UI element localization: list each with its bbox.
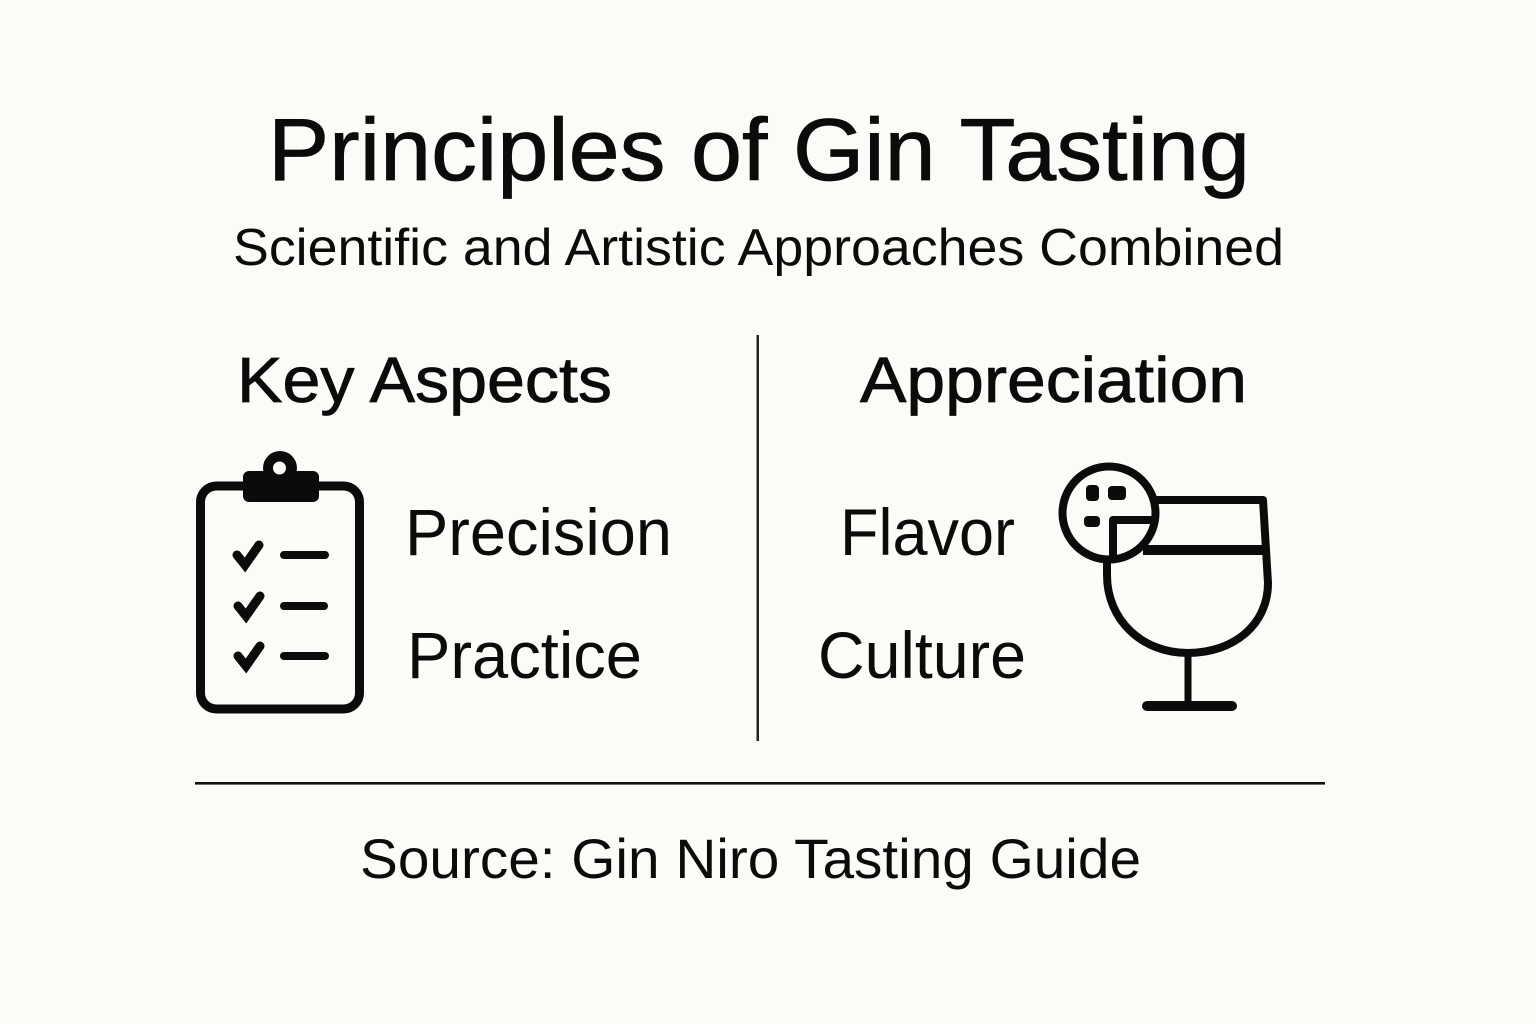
label: precision: Precision	[405, 495, 672, 569]
icon: wine glass with tasting wheel	[1062, 466, 1268, 706]
icon: clipboard checklist	[200, 451, 360, 709]
label: practice: Practice	[407, 618, 642, 692]
title: Principles of Gin Tasting	[268, 100, 1250, 199]
source: Source: Gin Niro Tasting Guide	[360, 827, 1141, 890]
horizontal divider	[195, 782, 1325, 785]
vertical divider	[756, 335, 759, 741]
label: flavor: Flavor	[840, 495, 1015, 569]
subtitle: Scientific and Artistic Approaches Combined	[233, 219, 1284, 277]
heading: key aspects: Key Aspects	[237, 344, 612, 416]
heading: appreciation: Appreciation	[860, 344, 1247, 416]
label: culture: Culture	[818, 618, 1026, 692]
